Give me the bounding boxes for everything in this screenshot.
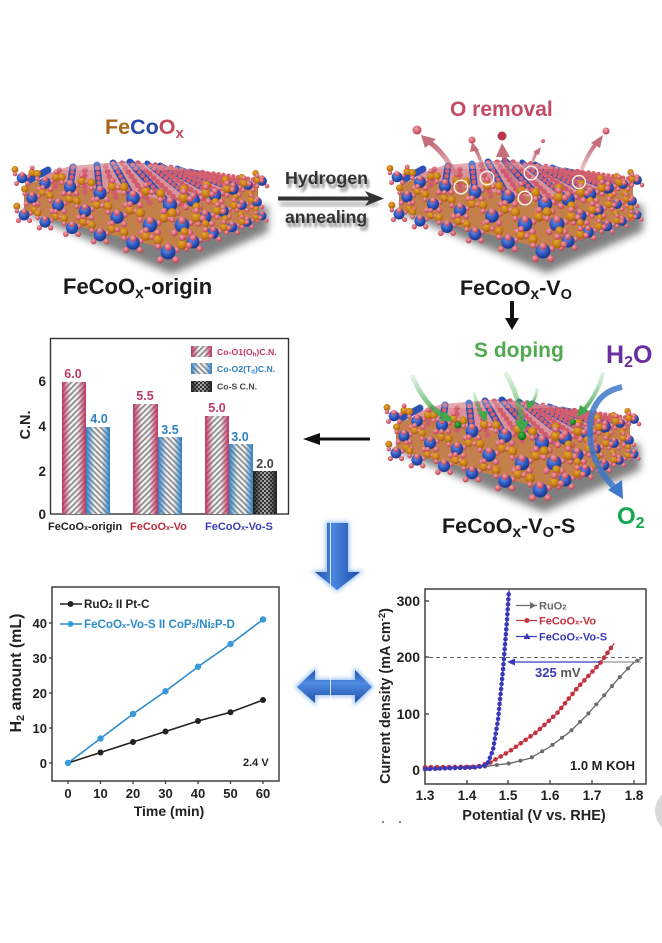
axis ticks (425, 601, 634, 784)
y tick labels (397, 593, 420, 778)
x tick labels: 50 (223, 786, 238, 801)
x tick labels (416, 788, 644, 803)
legend: RuO2 (539, 600, 566, 612)
overpotential value: 325 mV (535, 665, 581, 680)
label: FeCoOx-Vo: x (530, 286, 539, 303)
x tick labels: 1.6 (541, 788, 560, 803)
legend (60, 598, 235, 631)
legend: FeCoOx-Vo-S (539, 632, 607, 644)
label: FeCoOx-origin: -origin (144, 274, 212, 299)
shape (315, 523, 360, 590)
line chart: H2 amount (8, 587, 279, 819)
black series (68, 697, 266, 763)
x tick labels: 10 (93, 786, 108, 801)
axis ticks (49, 623, 263, 784)
label: H2O: O (633, 341, 652, 369)
corner grey blob (655, 792, 662, 830)
label: annealing shadow: annealing (287, 211, 369, 231)
x tick labels: 40 (191, 786, 205, 801)
legend (191, 346, 277, 392)
escaping arrows (426, 139, 600, 198)
legend: Co-O2(T (217, 364, 251, 374)
x tick labels: 1.4 (458, 788, 477, 803)
bars: origin (62, 382, 110, 514)
bars: Vo (133, 404, 182, 514)
x axis title: Potential (V vs. RHE) (462, 808, 606, 824)
arrow: hydrogen annealing (278, 168, 384, 231)
blue series (425, 590, 509, 769)
x labels: FeCoOx-Vo (130, 521, 187, 533)
title: FeCoOx: FeCoO (105, 115, 176, 139)
stray marks (382, 821, 401, 823)
label: FeCoOx-Vo-S: -S (554, 514, 575, 538)
dashed 200 reference (429, 656, 646, 658)
arrow: blue down (315, 522, 360, 590)
x tick labels: 1.5 (499, 788, 518, 803)
plot frame (50, 338, 288, 514)
legend: d (251, 370, 255, 376)
crystal: FeCoOx-Vo-S slab (384, 396, 641, 512)
green arrows (412, 372, 603, 430)
label: FeCoOx-Vo-S: FeCoO (442, 514, 512, 538)
crystal: FeCoOx origin slab (12, 158, 269, 274)
x tick labels: 1.7 (583, 788, 601, 803)
x tick labels (64, 786, 270, 801)
x labels: FeCoOx-Vo-S (205, 521, 273, 533)
x tick labels: 0 (64, 786, 72, 801)
x labels: FeCoOx-origin (48, 521, 122, 533)
legend: )C.N. (255, 364, 275, 374)
seam (329, 668, 332, 704)
plot frame (52, 587, 279, 781)
y tick labels: 200 (397, 649, 420, 665)
arrow: blue double (297, 668, 372, 704)
label: O2: O (617, 503, 636, 530)
water oxidation arrow (590, 341, 652, 532)
y axis title: H (8, 721, 25, 733)
reference grey line (600, 661, 641, 663)
bar values: 3.0 (231, 430, 249, 444)
arrow: to bar chart (303, 433, 370, 445)
label: H2O: H (606, 341, 624, 369)
blue series (65, 616, 266, 766)
legend (516, 600, 607, 644)
label: Hydrogen: Hydrogen (285, 168, 368, 188)
arrow heads (421, 135, 603, 157)
legend: )C.N. (256, 347, 277, 357)
y axis ticks: 0 (38, 507, 46, 522)
bar values: 5.5 (136, 389, 154, 403)
y axis ticks (38, 374, 46, 522)
glow (315, 523, 360, 590)
voltage label: 2.4 V (243, 757, 269, 769)
shape (297, 670, 372, 703)
grey series (425, 657, 643, 769)
bar values: 3.5 (161, 423, 179, 437)
label: FeCoOx-Vo-S: x (512, 524, 521, 541)
arrow: down to S doping (505, 301, 519, 330)
legend: FeCoOx-Vo-S II CoP3/Ni2P-D (84, 618, 235, 631)
S doping arrows (412, 339, 603, 440)
removed oxygen atoms (412, 126, 422, 134)
y axis title: ) (378, 608, 394, 613)
y tick labels: 20 (33, 686, 47, 701)
label: FeCoOx-Vo-S: -V (521, 514, 543, 538)
crystal: FeCoOx-Vo slab (387, 157, 644, 273)
plot frame (425, 589, 646, 784)
y axis title: Current density (mA cm (378, 621, 394, 784)
y tick labels: 10 (33, 721, 47, 736)
y tick labels: 0 (412, 762, 420, 778)
bar values: 4.0 (90, 412, 108, 426)
legend: Co-S C.N. (217, 382, 257, 392)
red series (425, 643, 614, 767)
y axis ticks: 4 (38, 419, 46, 434)
label: FeCoOx-Vo-S: O (543, 525, 554, 541)
legend: FeCoOx-Vo (539, 616, 596, 628)
label: annealing: annealing (285, 207, 367, 227)
arrow line (278, 196, 370, 200)
line chart: polarization curves (377, 589, 646, 824)
y axis title: C.N. (18, 410, 34, 440)
heading: O removal: O removal (450, 98, 553, 121)
legend: h (253, 352, 257, 358)
bar values: 2.0 (256, 457, 274, 471)
label: FeCoOx-Vo: O (561, 287, 572, 303)
x axis title: Time (min) (134, 803, 204, 819)
arrow shadow (280, 202, 378, 206)
y axis title: 2 (15, 715, 27, 721)
label: FeCoOx-origin: x (135, 285, 144, 302)
legend: RuO2 II Pt-C (84, 598, 150, 611)
x tick labels: 1.3 (416, 788, 435, 803)
y axis title: -2 (377, 613, 388, 621)
y tick labels (33, 616, 47, 771)
label: FeCoOx-Vo: -V (539, 276, 561, 300)
green arrow heads (440, 400, 589, 434)
bar values: 6.0 (64, 367, 82, 381)
vacancy rings (454, 166, 586, 205)
y axis ticks: 6 (38, 374, 46, 389)
electrolyte label: 1.0 M KOH (570, 758, 635, 773)
bar values: 5.0 (208, 401, 226, 415)
label: Hydrogen shadow: Hydrogen (287, 172, 370, 192)
x tick labels: 20 (126, 786, 140, 801)
O removal arrows and atoms (412, 98, 610, 205)
y axis ticks: 2 (38, 464, 46, 479)
legend: Co-O1(O (217, 347, 253, 357)
x tick labels: 60 (256, 786, 270, 801)
label: FeCoOx-Vo: FeCoO (460, 276, 530, 300)
label: H2O: 2 (624, 354, 633, 371)
bars: Vo-S (205, 416, 277, 514)
heading: S doping: S doping (474, 339, 564, 362)
y tick labels: 0 (40, 756, 47, 771)
y axis title: amount (mL) (8, 613, 25, 715)
title: FeCoOx: x (176, 125, 184, 142)
label: O2: 2 (636, 515, 645, 532)
arrow head (365, 191, 384, 206)
bar values (64, 367, 274, 471)
overpotential arrow (507, 658, 600, 666)
y tick labels: 40 (33, 616, 47, 631)
curved arrow head (608, 480, 623, 499)
sulfur atoms (454, 421, 462, 429)
y tick labels: 100 (397, 706, 420, 722)
label: FeCoOx-origin: FeCoO (63, 274, 135, 299)
glow (297, 670, 372, 703)
x tick labels: 30 (158, 786, 173, 801)
bar chart: coordination numbers (18, 338, 288, 533)
y tick labels: 30 (33, 651, 47, 666)
curved arrow (590, 387, 622, 490)
x tick labels: 1.8 (625, 788, 644, 803)
y tick labels: 300 (397, 593, 420, 609)
x labels (48, 521, 273, 533)
seam (329, 522, 332, 590)
